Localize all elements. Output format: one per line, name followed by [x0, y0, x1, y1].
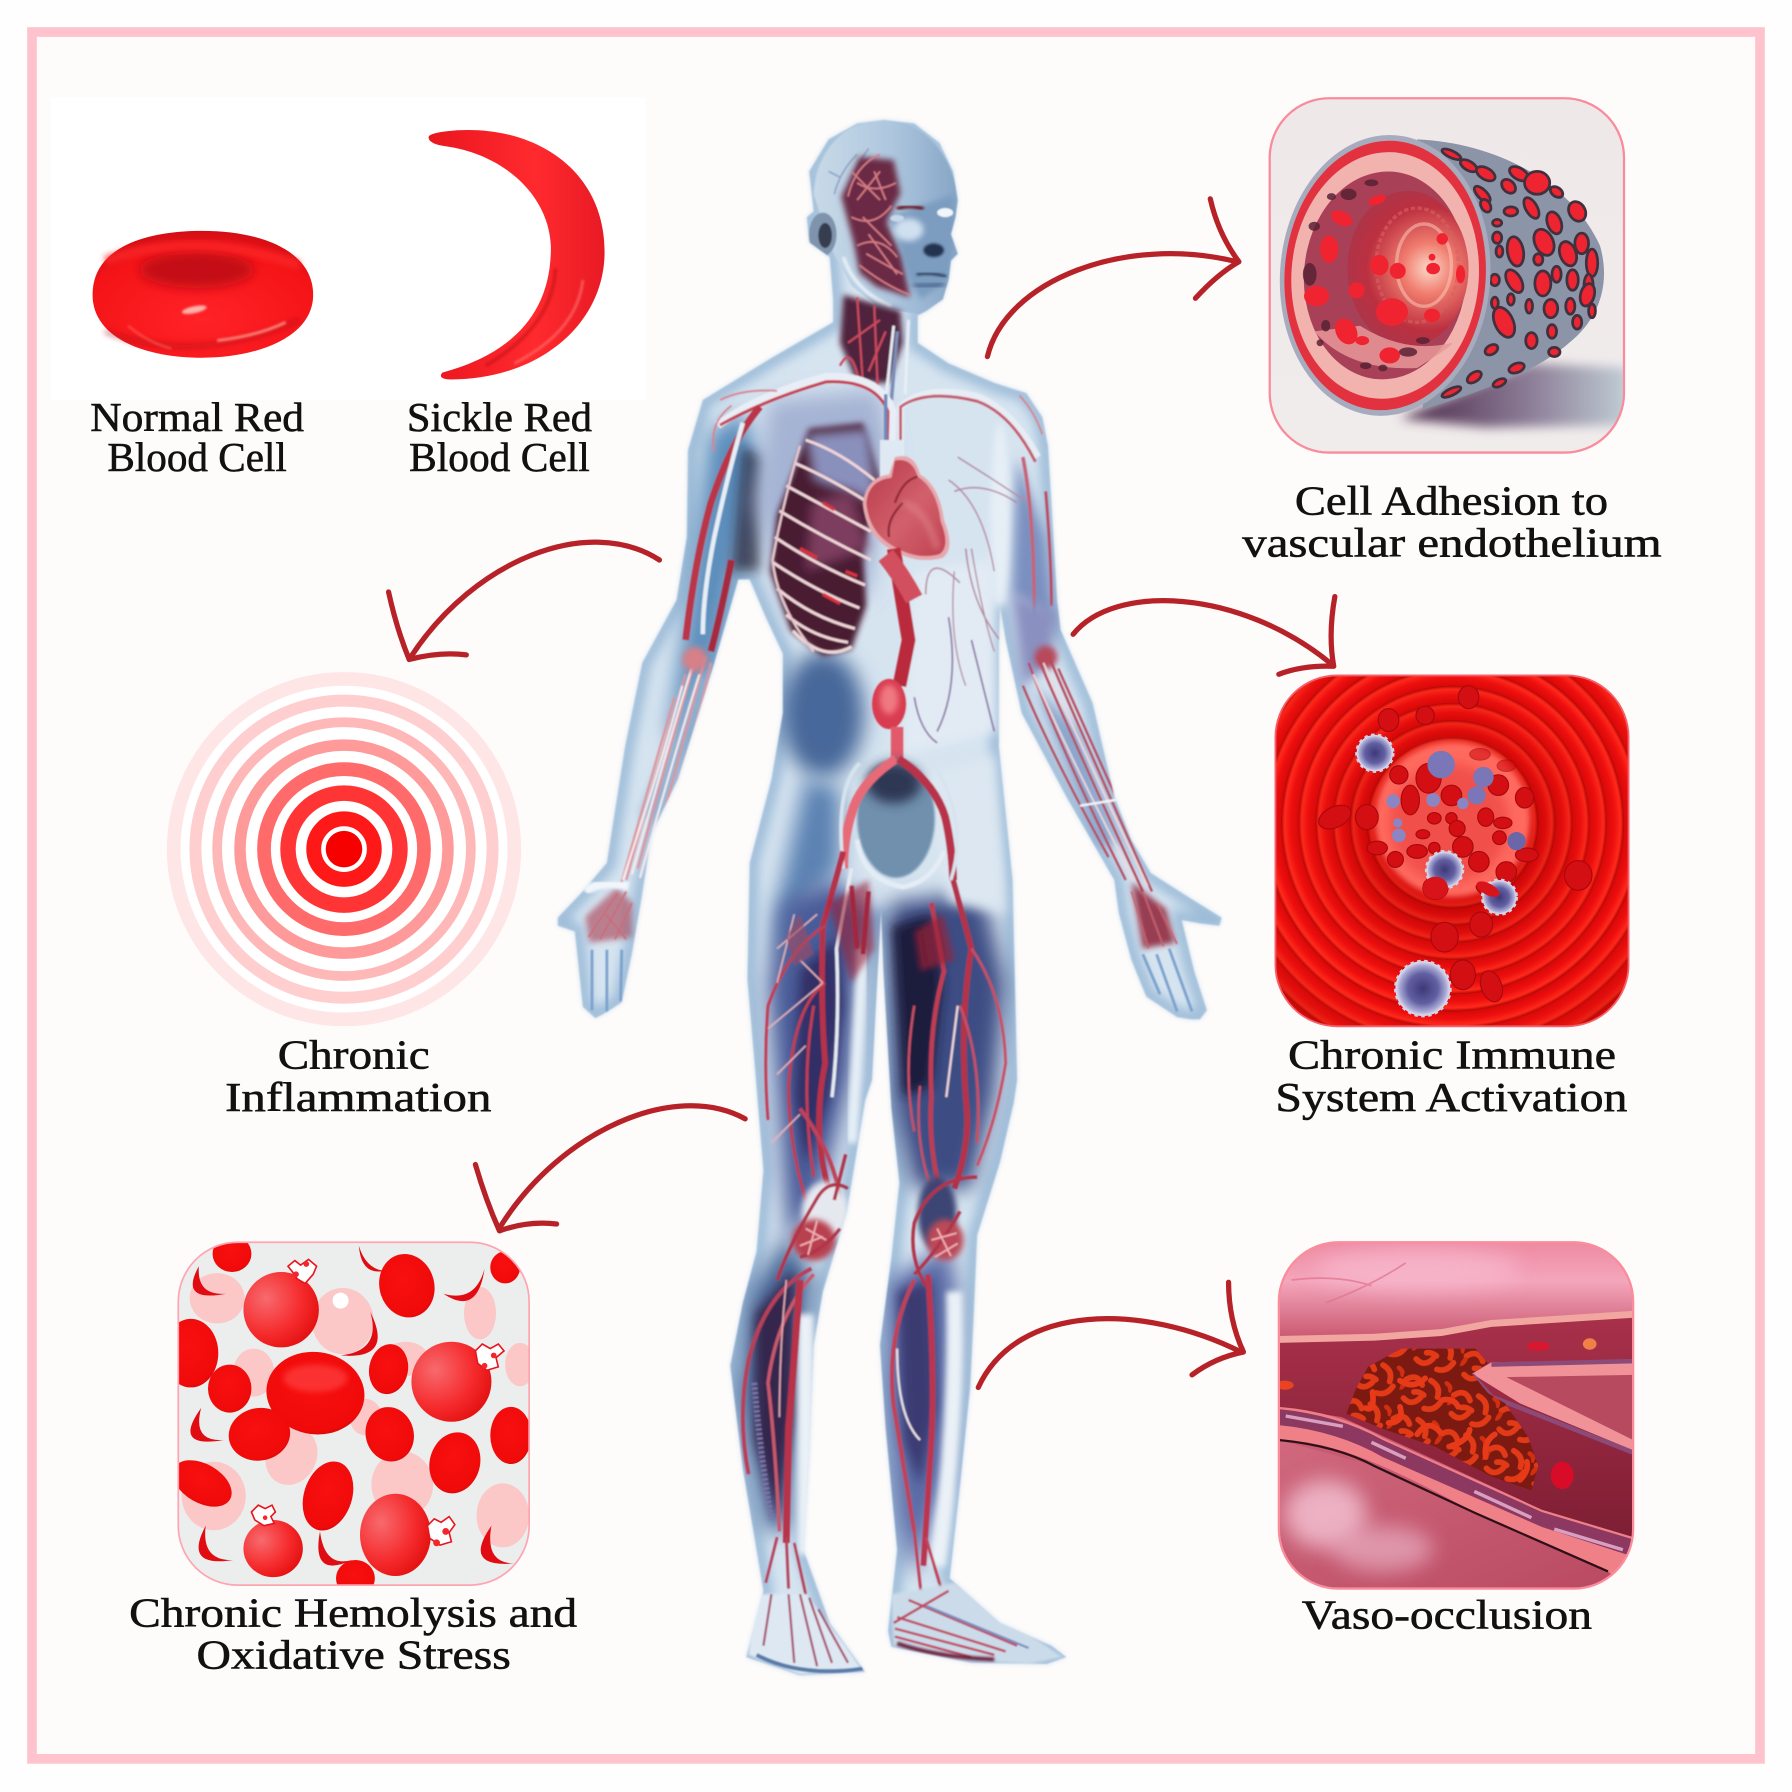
cast shadow [1400, 363, 1629, 427]
label: cell adhesion: vascular endothelium [1242, 520, 1662, 566]
label: cell adhesion [1242, 477, 1662, 566]
panel: vaso-occlusion [1275, 1242, 1633, 1594]
label: sickle red blood cell: Blood Cell [409, 434, 590, 480]
arrow: body to vaso-occlusion [978, 1282, 1243, 1387]
lumen [1279, 1317, 1633, 1537]
branch vessel [1472, 1360, 1633, 1450]
arrow: body to hemolysis [475, 1106, 745, 1231]
label: normal red blood cell: Blood Cell [107, 434, 287, 480]
central lumen [1375, 742, 1530, 897]
label: chronic immune activation: System Activation [1275, 1074, 1627, 1120]
arm vessels and hands [585, 407, 1192, 1011]
upper tissue [1279, 1242, 1633, 1339]
sickle crescents [190, 1246, 514, 1566]
sickle cell clot [1346, 1349, 1538, 1490]
panel: normal red blood cell [93, 231, 313, 358]
head and face [809, 120, 958, 314]
label: vaso-occlusion: Vaso-occlusion [1302, 1592, 1592, 1638]
label: chronic hemolysis: Oxidative Stress [197, 1632, 511, 1678]
vessel outer wall [1417, 139, 1604, 409]
neck vessels [840, 295, 909, 400]
arrow: body to cell adhesion [987, 199, 1239, 357]
panel: cell adhesion to vascular endothelium [1270, 98, 1629, 453]
label: normal red blood cell [90, 394, 304, 480]
label: chronic inflammation: Chronic [278, 1032, 430, 1078]
label: sickle red blood cell: Sickle Red [407, 394, 592, 440]
lower leg vessels [743, 1269, 943, 1594]
human body with circulatory system [558, 120, 1222, 1675]
thigh vessels [766, 851, 1006, 1200]
pale ghost cells [182, 1273, 535, 1547]
cross-section rings [1280, 135, 1490, 416]
arrow: body to chronic inflammation [389, 542, 659, 659]
label: sickle red blood cell [407, 394, 592, 480]
label: normal red blood cell: Normal Red [90, 394, 304, 440]
shading blocks [558, 120, 1222, 1675]
label: chronic hemolysis: Chronic Hemolysis and [129, 1589, 578, 1635]
free cells [1551, 1462, 1574, 1489]
label: chronic inflammation: Inflammation [225, 1074, 491, 1120]
red cells [1315, 686, 1592, 1005]
knees [777, 1154, 977, 1286]
label: chronic immune activation [1275, 1032, 1627, 1120]
lower wall band [1279, 1407, 1633, 1594]
panel: chronic immune system activation [1275, 675, 1629, 1026]
aorta and iliac arteries [841, 488, 1017, 887]
label: cell adhesion: Cell Adhesion to [1295, 477, 1608, 523]
label: chronic inflammation [225, 1032, 491, 1120]
white blood cells [1357, 735, 1526, 1016]
label: chronic immune activation: Chronic Immune [1288, 1032, 1616, 1078]
upper wall [1279, 1314, 1633, 1339]
red cells [163, 1235, 531, 1597]
burst fragments [251, 1259, 504, 1545]
panel: sickle red blood cell [429, 130, 605, 379]
panel: chronic inflammation target [167, 672, 521, 1026]
label: chronic hemolysis [129, 1589, 578, 1678]
panel: chronic hemolysis and oxidative stress [163, 1235, 535, 1597]
lower tissue [1279, 1440, 1633, 1594]
heart [863, 440, 949, 560]
arrow: body to immune activation [1073, 597, 1335, 674]
rib cage [770, 423, 880, 656]
aortic arch and shoulders vessels [713, 377, 1042, 686]
feet [749, 1583, 1063, 1674]
